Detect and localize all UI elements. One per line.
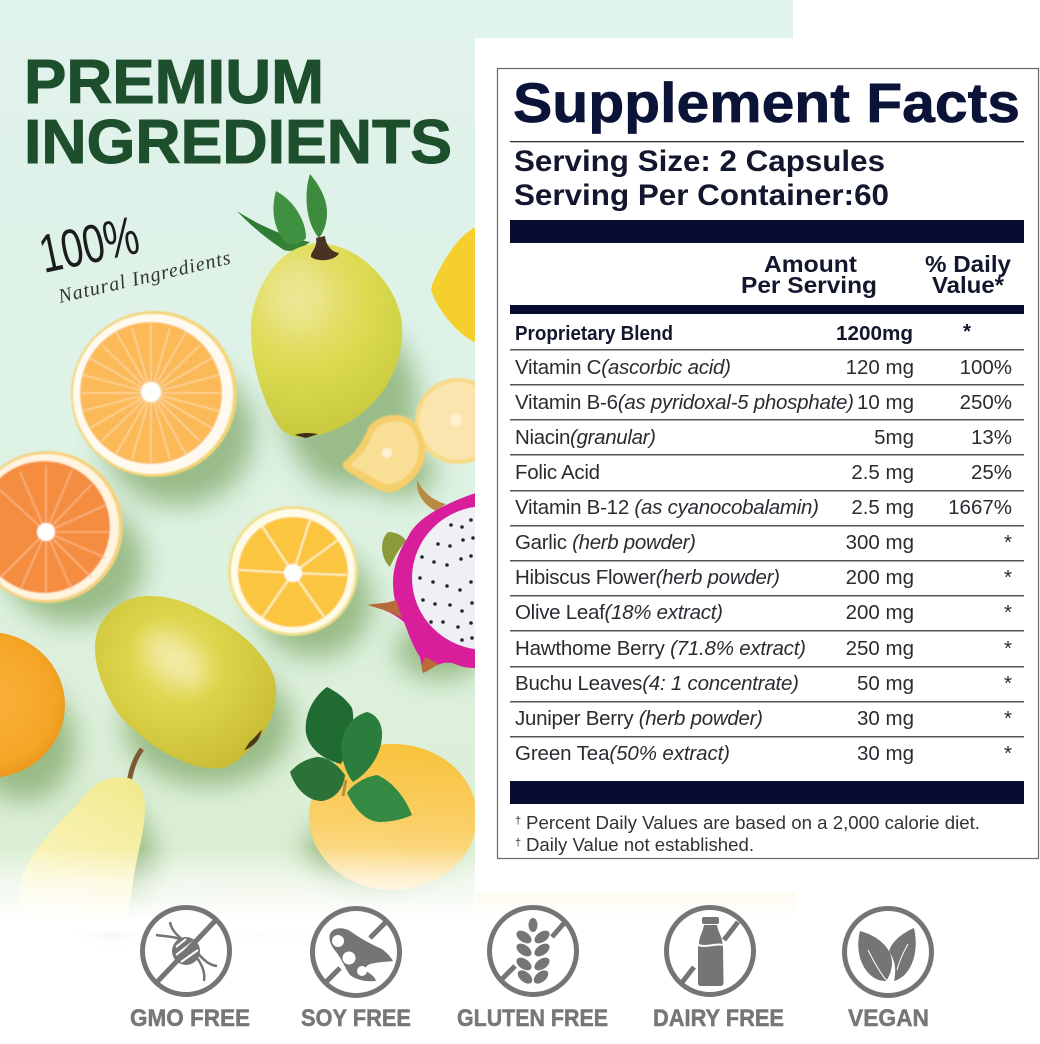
fruit: halved lemon (228, 506, 358, 636)
handwritten note: 100% natural ingredients (34, 205, 233, 308)
label: SOY FREE (301, 1005, 411, 1032)
amounts per serving: 2.5 mg (851, 461, 914, 484)
column headers: Amount (764, 251, 857, 277)
amounts per serving: 50 mg (857, 672, 914, 695)
ingredient names: Garlic (herb powder) (515, 531, 696, 554)
footnotes: † (515, 815, 521, 827)
column headers: % Daily (925, 251, 1011, 277)
column headers: Per Serving (741, 272, 877, 298)
amounts per serving: 2.5 mg (851, 496, 914, 519)
column headers (741, 251, 1011, 298)
row: proprietary blend: Proprietary Blend (515, 322, 673, 345)
daily values: * (1004, 566, 1012, 589)
row: proprietary blend: * (963, 320, 971, 343)
fruit: peeled lemon slice (343, 415, 425, 493)
footer bar (510, 781, 1024, 804)
amounts per serving: 5mg (874, 426, 914, 449)
amounts per serving: 200 mg (846, 601, 914, 624)
daily values: * (1004, 672, 1012, 695)
footnotes (515, 813, 980, 855)
daily values: * (1004, 742, 1012, 765)
title: premium ingredients (24, 48, 452, 177)
handwritten note: 100% natural ingredients: 100% (34, 205, 144, 285)
daily values: * (1004, 707, 1012, 730)
amounts per serving: 120 mg (846, 356, 914, 379)
footnotes: Daily Value not established. (526, 835, 754, 855)
ingredient names: Green Tea(50% extract) (515, 742, 730, 765)
icon: leaves (844, 908, 932, 996)
panel: mint fruit photo background (0, 0, 795, 933)
fruit: small lemon slice (415, 378, 501, 464)
daily values: 1667% (948, 496, 1012, 519)
header bar (510, 220, 1024, 243)
fruit: faint citrus under fade (210, 890, 314, 926)
amounts per serving: 30 mg (857, 707, 914, 730)
row: proprietary blend (515, 320, 971, 345)
badge: vegan (844, 908, 932, 1032)
amounts per serving: 300 mg (846, 531, 914, 554)
amounts per serving: 250 mg (846, 637, 914, 660)
serving information: Serving Size: 2 Capsules (514, 145, 885, 178)
amounts per serving: 10 mg (857, 391, 914, 414)
fruit: large yellow citrus (95, 596, 276, 768)
daily values: 250% (960, 391, 1012, 414)
column headers: Value* (932, 272, 1004, 298)
icon: crossed-out soybean (312, 908, 400, 996)
icon: crossed-out wheat (490, 908, 576, 994)
daily values: 100% (960, 356, 1012, 379)
badge: soy free (301, 908, 411, 1032)
ingredient names: Vitamin C(ascorbic acid) (515, 356, 731, 379)
icon: crossed-out bottle (666, 908, 754, 994)
fruit: whole orange at left edge (0, 632, 65, 778)
fruit: lemon at panel edge (431, 227, 476, 343)
daily values: * (1004, 531, 1012, 554)
table row lines (510, 349, 1024, 738)
fruit: lemon with leaves (290, 687, 477, 890)
amounts per serving (846, 356, 914, 765)
daily values: * (1004, 637, 1012, 660)
footnotes: † (515, 837, 521, 849)
fruit: halved grapefruit (0, 451, 123, 603)
label: VEGAN (848, 1005, 929, 1032)
daily values: 13% (971, 426, 1012, 449)
ingredient names: Hawthome Berry (71.8% extract) (515, 637, 806, 660)
white fade at bottom of photo (0, 848, 476, 922)
footnotes: Percent Daily Values are based on a 2,000 calorie diet. (526, 813, 980, 833)
fruit: halved orange (71, 311, 237, 477)
title: premium ingredients: PREMIUM (24, 48, 324, 117)
ingredient names: Folic Acid (515, 461, 600, 484)
badge: gluten free (457, 908, 608, 1032)
daily values: * (1004, 601, 1012, 624)
row: proprietary blend: 1200mg (836, 322, 913, 345)
ingredient names: Juniper Berry (herb powder) (515, 707, 763, 730)
title: premium ingredients: INGREDIENTS (24, 108, 452, 177)
label: GMO FREE (130, 1005, 250, 1032)
fruit: light green pear (19, 749, 145, 930)
ingredient names: Vitamin B-6(as pyridoxal-5 phosphate) (515, 391, 854, 414)
ingredient names: Olive Leaf(18% extract) (515, 601, 723, 624)
fruit: dragon fruit (368, 480, 560, 673)
label: DAIRY FREE (653, 1005, 784, 1032)
handwritten note: 100% natural ingredients: Natural Ingredients (55, 247, 233, 308)
badge: dairy free (653, 908, 784, 1032)
amounts per serving: 200 mg (846, 566, 914, 589)
ingredient names: Vitamin B-12 (as cyanocobalamin) (515, 496, 819, 519)
icon: crossed-out DNA (142, 908, 230, 994)
panel: supplement facts table (475, 38, 1040, 893)
heading: supplement facts: Supplement Facts (513, 71, 1020, 134)
daily values: 25% (971, 461, 1012, 484)
ingredient names (515, 356, 854, 765)
fruit: yellow pear with leaves (237, 174, 402, 438)
amounts per serving: 30 mg (857, 742, 914, 765)
label: GLUTEN FREE (457, 1005, 608, 1032)
badge: GMO free (130, 908, 250, 1032)
ingredient names: Hibiscus Flower(herb powder) (515, 566, 780, 589)
serving information (514, 145, 889, 212)
fruit shadows (0, 318, 484, 920)
serving information: Serving Per Container:60 (514, 179, 889, 212)
ingredient names: Buchu Leaves(4: 1 concentrate) (515, 672, 799, 695)
ingredient names: Niacin(granular) (515, 426, 656, 449)
daily values (948, 356, 1012, 765)
